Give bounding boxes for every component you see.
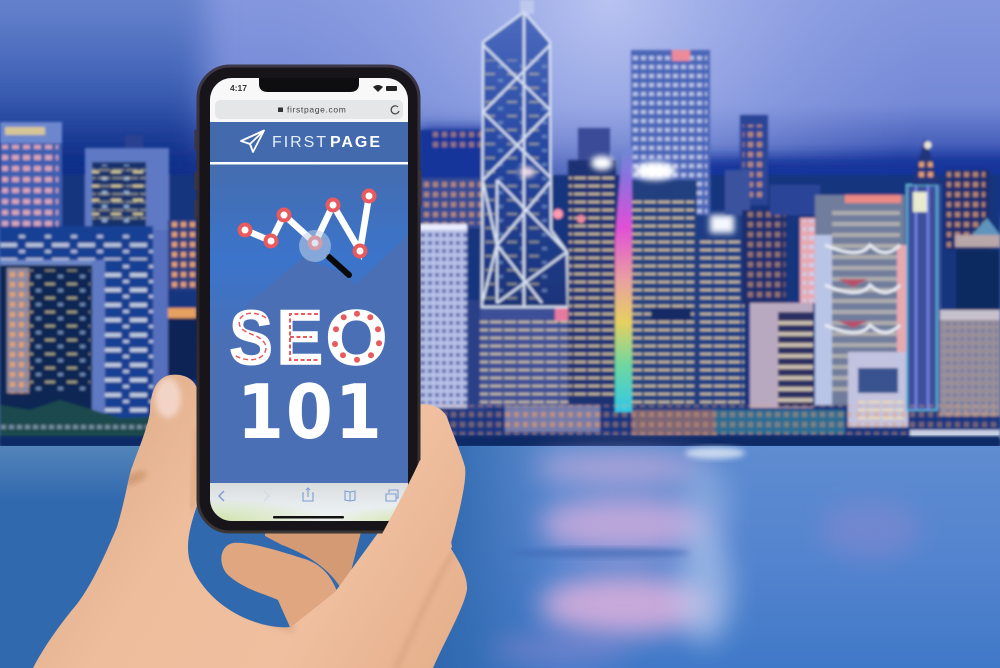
browser status bar [210,78,408,122]
magnifier handle [329,257,349,275]
hero gradient panel [210,193,408,320]
icon: share [303,488,313,501]
logo header: PAGE [330,134,380,151]
building: far right towers [940,170,1000,416]
building: left twin-shade tower [85,135,169,278]
logo header [210,130,408,164]
phone screen [210,78,408,521]
line chart icon [238,188,376,275]
building: left orange block [168,220,198,380]
building: gold window tower [553,128,616,405]
waterfront lights band [440,405,1000,435]
hand: curled finger [221,543,340,632]
hand: palm and thumb [33,375,467,668]
phone side buttons [196,130,420,218]
icon: back chevron [219,491,224,501]
building: gold stripe block [715,303,845,434]
hand: back finger behind phone [265,528,362,595]
dots on O [332,311,382,363]
stitches on S [234,313,266,360]
SEO title [230,309,385,366]
building: Bank of China tower [482,0,568,307]
background: skyline [0,0,1000,445]
icon: battery [386,86,397,91]
shoreline trees left [0,400,200,440]
phone body [198,66,419,532]
icon: wifi [373,85,383,92]
building: waterfront blue towers [697,115,820,410]
101 title: 101 [237,369,384,456]
SEO title: E [277,296,323,380]
building: distant centre hill lights [420,130,490,228]
water reflections [490,447,920,665]
building: square-windowed tower [631,50,710,310]
icon: tabs [386,490,398,501]
icon: forward chevron [264,491,269,501]
phone [196,66,420,532]
building: left podium block [0,226,168,421]
icon: paper plane logo [241,130,264,152]
shoreline [0,436,1000,447]
url bar: firstpage.com [287,104,346,114]
home indicator [273,516,344,518]
building: HSBC tower [800,195,908,427]
building: low block centre [467,300,600,432]
water [0,446,1000,668]
building: neon outlined tower [906,138,941,410]
chart points [238,188,376,258]
magnifier lens [299,230,331,262]
building: rainbow-lit tower [615,148,717,436]
icon: book [345,491,355,501]
stitches on E [290,314,318,360]
icon: reload [391,106,399,114]
background: sky [0,0,1000,218]
building: left hotel tower [0,122,62,230]
logo wordmark: FIRST [272,134,326,151]
browser toolbar [210,483,408,521]
SEO title: O [326,296,387,381]
SEO title: S [230,295,273,380]
building: lavender tower [420,224,467,408]
url bar [215,100,403,119]
browser status bar: 4:17 [230,83,247,93]
icon: lock [278,108,283,112]
chart long shadow [244,236,408,320]
hand: front finger overlapping phone corner [335,460,452,625]
